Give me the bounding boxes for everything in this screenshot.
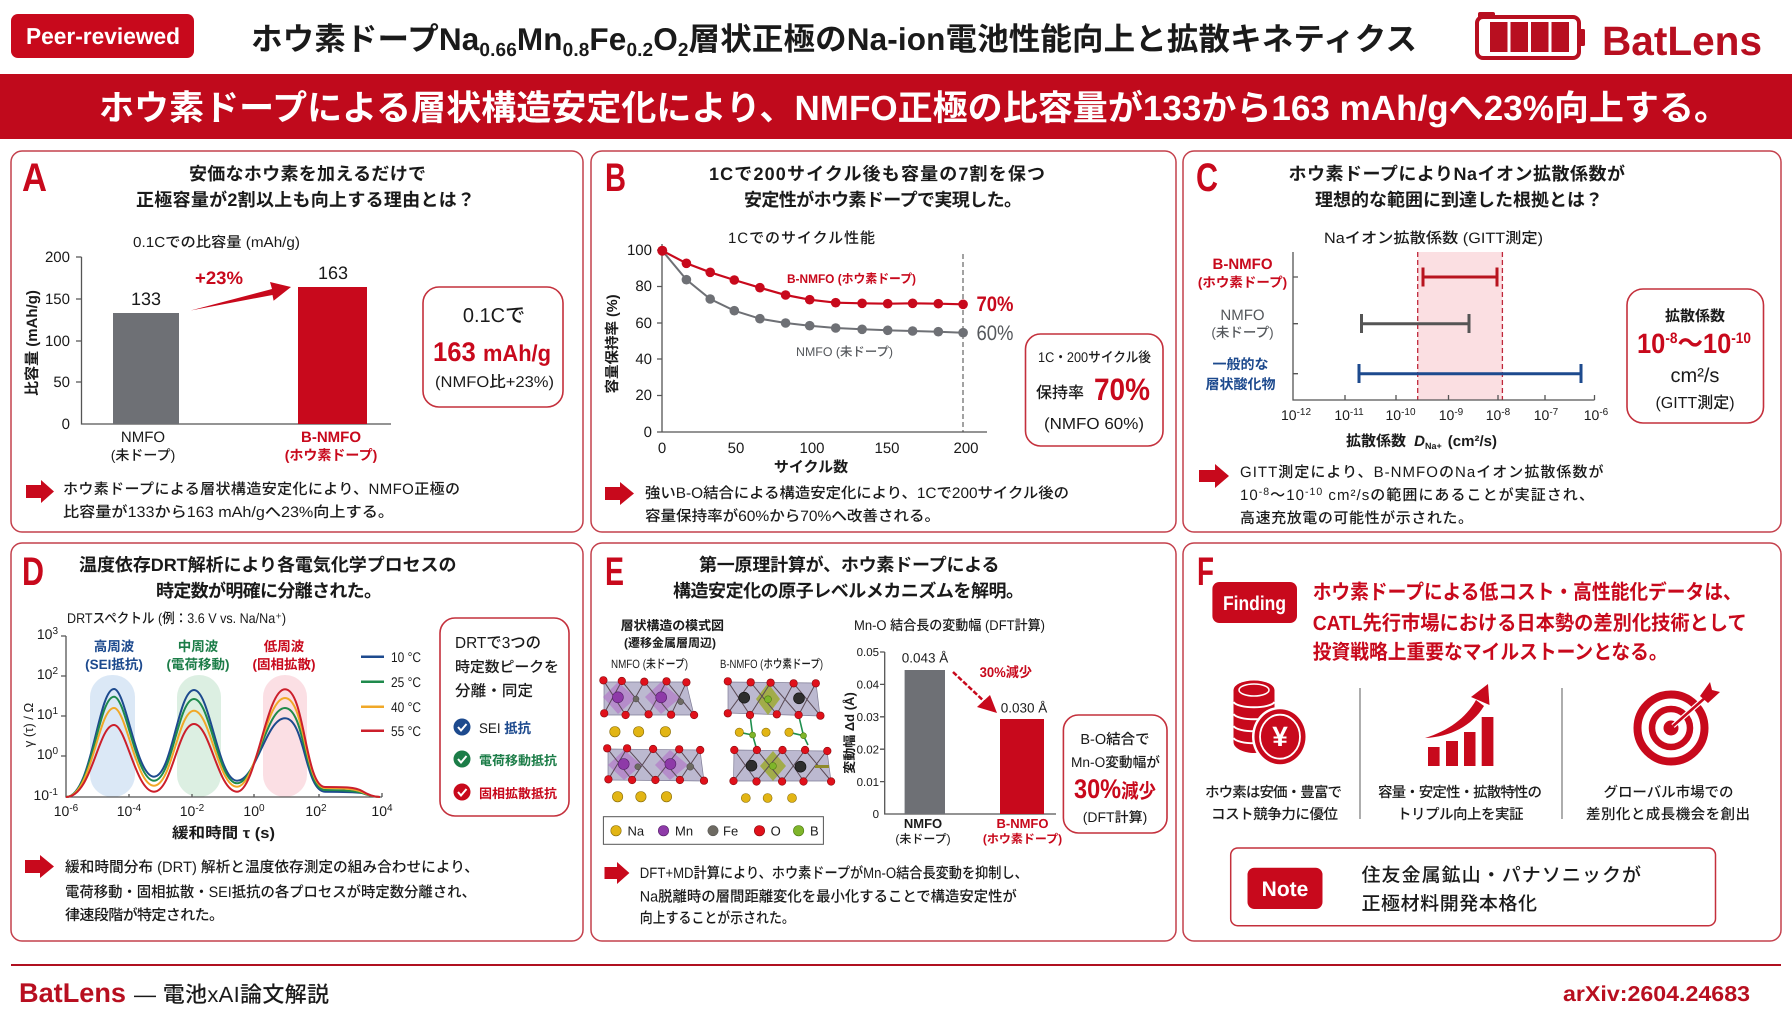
- callout: three time constants: 分離・同定: [455, 682, 533, 700]
- range chart: diffusion coefficient: (cm²/s): [1448, 433, 1497, 450]
- panel: F: [1183, 543, 1781, 941]
- badge: Finding: [1212, 582, 1297, 623]
- logo: BatLens battery: BatLens: [1602, 18, 1762, 64]
- bar chart: specific capacity: 0.1Cでの比容量 (mAh/g): [133, 234, 300, 251]
- note box: 住友金属鉱山・パナソニックが: [1362, 865, 1641, 887]
- bar chart: Mn-O variation: 0.05: [857, 647, 879, 659]
- heading E: 構造安定化の原子レベルメカニズムを解明。: [673, 581, 1024, 601]
- callout: diffusion range: ～10: [1677, 328, 1731, 359]
- curve: 40 °C: [66, 698, 380, 797]
- series: B-NMFO: [657, 246, 968, 309]
- callout: 163 mAh/g: (NMFO比+23%): [435, 374, 554, 391]
- conclusion E: Na脱離時の層間距離変化を最小化することで構造安定性が: [640, 889, 1017, 906]
- line chart: cycle performance: サイクル数: [774, 459, 848, 476]
- panel letter B: B: [605, 156, 626, 200]
- line chart: cycle performance: 150: [874, 440, 900, 457]
- panel letter A: A: [22, 156, 47, 200]
- line chart: cycle performance: [604, 230, 1014, 476]
- bar chart: Mn-O variation: 0.030 Å: [1001, 701, 1047, 716]
- caption: global market: 差別化と成長機会を創出: [1586, 806, 1750, 823]
- line chart: cycle performance: 40: [635, 351, 652, 368]
- title: Mn: [517, 21, 563, 57]
- bar chart: specific capacity: 150: [45, 291, 70, 308]
- line chart: cycle performance: 0: [644, 424, 652, 441]
- bar chart: Mn-O variation: 0.03: [857, 712, 879, 724]
- line chart: DRT spectrum: DRTスペクトル (例：3.6 V vs. Na/Na⁺): [67, 610, 286, 626]
- conclusion C: 10: [1240, 487, 1258, 504]
- diagram: layered structure: NMFO (未ドープ): [611, 657, 688, 671]
- heading D: 時定数が明確に分離された。: [156, 581, 382, 601]
- line chart: cycle performance: 20: [635, 387, 652, 404]
- callout: 163 mAh/g: 0.1Cで: [463, 305, 525, 327]
- line chart: DRT spectrum: 10: [34, 787, 49, 803]
- conclusion C: [1240, 464, 1604, 527]
- bar chart: Mn-O variation: 0.02: [857, 744, 879, 756]
- structure: B-NMFO: [724, 678, 835, 802]
- legend: atoms: [603, 817, 823, 844]
- note box: Note: [1262, 878, 1308, 901]
- callout: three time constants: 固相拡散抵抗: [479, 786, 557, 801]
- callout: retention 70%: 1C・200サイクル後: [1038, 349, 1151, 365]
- range chart: diffusion coefficient: -10: [1401, 407, 1416, 418]
- bar chart: Mn-O variation: [842, 617, 1062, 846]
- line chart: DRT spectrum: γ (τ) / Ω: [21, 702, 36, 747]
- bar chart: specific capacity: 133: [131, 289, 161, 309]
- line chart: DRT spectrum: 2: [52, 666, 58, 677]
- line chart: DRT spectrum: 1: [52, 706, 58, 717]
- callout: three time constants: SEI 抵抗: [479, 720, 531, 736]
- series: NMFO: [662, 251, 968, 338]
- conclusion C: -8: [1259, 486, 1269, 498]
- line chart: cycle performance: 50: [728, 440, 744, 457]
- note box: 正極材料開発本格化: [1362, 893, 1537, 915]
- heading A: 安価なホウ素を加えるだけで: [189, 164, 426, 184]
- line chart: DRT spectrum: [21, 610, 421, 842]
- legend: atoms: Mn: [675, 824, 693, 838]
- line chart: DRT spectrum: 高周波: [94, 639, 135, 654]
- panel: C: [1183, 151, 1781, 532]
- bar chart: specific capacity: (未ドープ): [111, 447, 175, 463]
- bar chart: specific capacity: NMFO: [121, 429, 165, 446]
- caption: cost: ホウ素は安価・豊富で: [1205, 784, 1342, 801]
- title: 0.66: [479, 40, 517, 61]
- heading C: ホウ素ドープによりNaイオン拡散係数が: [1288, 164, 1625, 184]
- line chart: cycle performance: 100: [627, 242, 652, 259]
- line chart: cycle performance: 100: [799, 440, 825, 457]
- bar chart: Mn-O variation: (未ドープ): [895, 832, 951, 846]
- bar chart: specific capacity: 0: [62, 416, 70, 433]
- range chart: diffusion coefficient: 10: [1334, 407, 1350, 423]
- line chart: DRT spectrum: 10: [37, 626, 52, 642]
- conclusion A: [63, 481, 460, 521]
- line chart: DRT spectrum: 2: [321, 803, 327, 814]
- finding statement: 投資戦略上重要なマイルストーンとなる。: [1313, 641, 1668, 664]
- callout: retention 70%: 70%: [1094, 372, 1150, 407]
- title: O: [653, 21, 678, 57]
- range chart: diffusion coefficient: B-NMFO: [1212, 256, 1273, 273]
- callout: 30% reduction: 30%減少: [1074, 774, 1156, 804]
- caption: cost: [1205, 784, 1342, 823]
- conclusion E: [640, 865, 1028, 927]
- callout: diffusion range: -10: [1731, 330, 1751, 347]
- line chart: DRT spectrum: -4: [132, 803, 142, 814]
- panel letter D: D: [22, 550, 44, 594]
- heading C: [1288, 164, 1625, 210]
- legend: atoms: Fe: [723, 824, 738, 838]
- line chart: cycle performance: 1Cでのサイクル性能: [728, 230, 875, 247]
- legend: temperature: 40 °C: [391, 699, 421, 715]
- panel letter F: F: [1197, 550, 1214, 594]
- callout: three time constants: DRTで3つの: [455, 635, 541, 652]
- icon: coins and yen: [1234, 680, 1308, 767]
- curve: 10 °C: [66, 689, 380, 797]
- line chart: DRT spectrum: 0: [52, 746, 58, 757]
- finding statement: ホウ素ドープによる低コスト・高性能化データは、: [1313, 581, 1742, 604]
- conclusion C: GITT測定により、B-NMFOのNaイオン拡散係数が: [1240, 464, 1604, 481]
- range chart: diffusion coefficient: -8: [1501, 407, 1511, 418]
- icon: coins and yen: ¥: [1272, 721, 1288, 752]
- footer brand: — 電池xAI論文解説: [134, 982, 329, 1007]
- heading D: [79, 555, 456, 601]
- legend: temperature: 55 °C: [391, 723, 421, 739]
- heading E: [673, 555, 1024, 601]
- line chart: DRT spectrum: 10: [243, 803, 259, 819]
- panel: A: [11, 151, 583, 532]
- range chart: diffusion coefficient: (ホウ素ドープ): [1198, 275, 1287, 290]
- title: 0.8: [563, 40, 589, 61]
- callout: retention 70%: 保持率: [1036, 384, 1084, 402]
- legend: atoms: O: [771, 824, 781, 838]
- heading C: 理想的な範囲に到達した根拠とは？: [1315, 190, 1603, 210]
- line chart: DRT spectrum: 10: [37, 666, 52, 682]
- range chart: diffusion coefficient: 10: [1281, 407, 1297, 423]
- line chart: cycle performance: 200: [953, 440, 979, 457]
- conclusion D: 電荷移動・固相拡散・SEI抵抗の各プロセスが時定数分離され、: [65, 884, 476, 901]
- title: ホウ素ドープNa: [251, 21, 479, 57]
- heading A: 正極容量が2割以上も向上する理由とは？: [136, 190, 475, 210]
- line chart: DRT spectrum: (SEI抵抗): [85, 657, 143, 672]
- conclusion C: ～10: [1270, 487, 1304, 504]
- bar chart: Mn-O variation: NMFO: [904, 816, 942, 831]
- conclusion B: 容量保持率が60%から70%へ改善される。: [645, 508, 940, 525]
- callout: retention 70%: [1026, 334, 1163, 446]
- line chart: DRT spectrum: 3: [52, 626, 58, 637]
- line chart: DRT spectrum: 10: [37, 746, 52, 762]
- logo: BatLens battery: [1477, 12, 1762, 64]
- diagram: layered structure: 層状構造の模式図: [621, 618, 724, 633]
- legend: atoms: B: [810, 824, 819, 838]
- range chart: diffusion coefficient: -9: [1454, 407, 1464, 418]
- line chart: DRT spectrum: (電荷移動): [166, 657, 230, 672]
- line chart: DRT spectrum: -6: [69, 803, 79, 814]
- footer arXiv id: arXiv:2604.24683: [1563, 982, 1750, 1006]
- badge: Peer-reviewed: [11, 14, 194, 58]
- heading B: [709, 164, 1045, 210]
- range chart: diffusion coefficient: -6: [1599, 407, 1609, 418]
- line chart: DRT spectrum: 4: [387, 803, 393, 814]
- check: solid diffusion: [454, 784, 470, 800]
- callout: three time constants: [440, 618, 569, 816]
- callout: diffusion range: -8: [1665, 330, 1677, 347]
- heading A: [136, 164, 475, 210]
- line chart: cycle performance: NMFO (未ドープ): [796, 345, 893, 359]
- bar chart: Mn-O variation: 30%減少: [980, 664, 1032, 680]
- bar chart: specific capacity: 163: [318, 263, 348, 283]
- arrow E: [604, 862, 629, 884]
- callout: diffusion range: 拡散係数: [1665, 308, 1725, 325]
- arrow B: [605, 482, 634, 505]
- bar chart: Mn-O variation: 0.043 Å: [902, 651, 948, 666]
- bar chart: Mn-O variation: 0.04: [857, 680, 880, 692]
- title: Fe: [589, 21, 626, 57]
- range chart: diffusion coefficient: 10: [1486, 407, 1501, 423]
- callout: three time constants: 電荷移動抵抗: [479, 753, 557, 768]
- conclusion C: -10: [1305, 486, 1322, 498]
- conclusion C: 高速充放電の可能性が示された。: [1240, 510, 1473, 527]
- finding statement: [1313, 581, 1747, 664]
- range chart: diffusion coefficient: 層状酸化物: [1206, 376, 1276, 392]
- heading B: 安定性がホウ素ドープで実現した。: [744, 190, 1022, 210]
- badge: Finding: Finding: [1223, 593, 1286, 615]
- line chart: DRT spectrum: -1: [49, 787, 58, 798]
- conclusion D: 緩和時間分布 (DRT) 解析と温度依存測定の組み合わせにより、: [65, 859, 479, 876]
- callout: diffusion range: 10: [1637, 328, 1668, 359]
- range chart: diffusion coefficient: [1198, 230, 1609, 451]
- line chart: cycle performance: 容量保持率 (%): [604, 294, 621, 394]
- range chart: diffusion coefficient: 10: [1439, 407, 1454, 423]
- heading B: 1Cで200サイクル後も容量の7割を保つ: [709, 164, 1045, 184]
- bar chart: Mn-O variation: (ホウ素ドープ): [983, 832, 1062, 846]
- arrow D: [25, 855, 54, 878]
- bar chart: specific capacity: 比容量 (mAh/g): [24, 290, 41, 396]
- line chart: cycle performance: 80: [635, 278, 652, 295]
- line chart: DRT spectrum: 緩和時間 τ (s): [172, 825, 275, 842]
- bar chart: Mn-O variation: 0: [873, 809, 879, 821]
- line chart: DRT spectrum: 10: [37, 706, 52, 722]
- range chart: diffusion coefficient: 10: [1584, 407, 1599, 423]
- line chart: DRT spectrum: 10: [117, 803, 132, 819]
- callout: diffusion range: cm²/s: [1671, 365, 1719, 387]
- caption: global market: [1586, 784, 1750, 823]
- conclusion E: 向上することが示された。: [640, 910, 795, 927]
- headline band: ホウ素ドープによる層状構造安定化により、NMFO正極の比容量が133から163 mAh/gへ23%向上する。: [99, 89, 1729, 128]
- caption: triple improvement: 容量・安定性・拡散特性の: [1378, 784, 1542, 801]
- line chart: DRT spectrum: -2: [195, 803, 205, 814]
- line chart: DRT spectrum: 10: [305, 803, 321, 819]
- range chart: diffusion coefficient: NMFO: [1220, 307, 1265, 324]
- callout: 163 mAh/g: [423, 287, 563, 407]
- line chart: DRT spectrum: (固相拡散): [252, 657, 316, 672]
- arrow A: [26, 480, 54, 503]
- bar chart: specific capacity: [24, 234, 391, 463]
- caption: global market: グローバル市場での: [1604, 784, 1734, 801]
- bar chart: specific capacity: 200: [45, 249, 70, 266]
- line chart: DRT spectrum: 低周波: [264, 639, 305, 654]
- caption: triple improvement: トリプル向上を実証: [1397, 806, 1524, 823]
- conclusion D: [65, 859, 479, 924]
- callout: 30% reduction: [1063, 715, 1167, 833]
- bar chart: specific capacity: (ホウ素ドープ): [285, 447, 377, 463]
- range chart: diffusion coefficient: Naイオン拡散係数 (GITT測定): [1324, 230, 1543, 247]
- heading E: 第一原理計算が、ホウ素ドープによる: [699, 555, 1000, 575]
- panel: D: [11, 543, 583, 941]
- title: 層状正極のNa-ion電池性能向上と拡散キネティクス: [689, 21, 1417, 57]
- line chart: cycle performance: B-NMFO (ホウ素ドープ): [787, 272, 916, 286]
- callout: 163 mAh/g: 163 mAh/g: [433, 337, 551, 367]
- conclusion B: [645, 485, 1069, 525]
- callout: retention 70%: (NMFO 60%): [1044, 416, 1144, 433]
- arrow C: [1199, 464, 1229, 488]
- range chart: diffusion coefficient: (未ドープ): [1211, 325, 1274, 340]
- bar chart: specific capacity: 50: [53, 374, 70, 391]
- title: 0.2: [626, 40, 653, 61]
- line chart: DRT spectrum: 10: [54, 803, 69, 819]
- bar chart: specific capacity: +23%: [195, 268, 243, 288]
- callout: 30% reduction: B-O結合で: [1080, 731, 1150, 748]
- panel letter E: E: [605, 550, 624, 594]
- line chart: DRT spectrum: 10: [180, 803, 195, 819]
- diagram: layered structure: [600, 618, 835, 844]
- range chart: diffusion coefficient: -11: [1350, 407, 1364, 418]
- caption: triple improvement: [1378, 784, 1542, 823]
- structure: NMFO: [600, 676, 708, 802]
- footer brand: [19, 978, 329, 1008]
- range chart: diffusion coefficient: 拡散係数 D: [1346, 433, 1425, 450]
- range chart: diffusion coefficient: -12: [1297, 407, 1311, 418]
- check: charge transfer: [454, 750, 470, 768]
- legend: temperature: 10 °C: [391, 649, 421, 665]
- callout: diffusion range: [1627, 289, 1764, 423]
- line chart: DRT spectrum: 中周波: [178, 639, 219, 654]
- headline band: [0, 74, 1792, 139]
- conclusion C: cm²/sの範囲にあることが実証され、: [1323, 487, 1594, 504]
- bar chart: Mn-O variation: Mn-O 結合長の変動幅 (DFT計算): [854, 617, 1045, 633]
- finding statement: CATL先行市場における日本勢の差別化技術として: [1313, 612, 1747, 635]
- bar chart: specific capacity: 100: [45, 333, 70, 350]
- curve: 25 °C: [66, 697, 380, 797]
- bar chart: Mn-O variation: 変動幅 Δd (Å): [842, 692, 857, 774]
- heading D: 温度依存DRT解析により各電気化学プロセスの: [79, 555, 456, 575]
- line chart: cycle performance: 70%: [976, 293, 1014, 316]
- legend: temperature: 25 °C: [391, 674, 421, 690]
- conclusion A: ホウ素ドープによる層状構造安定化により、NMFO正極の: [63, 481, 460, 498]
- range chart: diffusion coefficient: 一般的な: [1212, 356, 1268, 372]
- conclusion B: 強いB-O結合による構造安定化により、1Cで200サイクル後の: [645, 485, 1069, 502]
- range chart: diffusion coefficient: Na+: [1425, 441, 1442, 451]
- range chart: diffusion coefficient: 10: [1534, 407, 1549, 423]
- range chart: diffusion coefficient: -7: [1549, 407, 1559, 418]
- diagram: layered structure: B-NMFO (ホウ素ドープ): [720, 657, 823, 671]
- callout: 30% reduction: Mn-O変動幅が: [1071, 754, 1160, 770]
- badge: Peer-reviewed: Peer-reviewed: [26, 23, 180, 49]
- panel: E: [591, 543, 1176, 941]
- line chart: cycle performance: 0: [658, 440, 666, 457]
- conclusion A: 比容量が133から163 mAh/gへ23%向上する。: [63, 504, 394, 521]
- line chart: cycle performance: 60%: [976, 322, 1014, 345]
- range chart: diffusion coefficient: 10: [1385, 407, 1401, 423]
- conclusion E: DFT+MD計算により、ホウ素ドープがMn-O結合長変動を抑制し、: [640, 865, 1028, 882]
- bar chart: Mn-O variation: B-NMFO: [996, 816, 1048, 831]
- line chart: cycle performance: 60: [635, 315, 652, 332]
- line chart: DRT spectrum: 0: [259, 803, 265, 814]
- note box: [1231, 848, 1716, 926]
- curve: 55 °C: [66, 689, 380, 797]
- legend: atoms: Na: [628, 824, 645, 838]
- bar chart: specific capacity: B-NMFO: [301, 429, 361, 446]
- icon: rising bars and arrow: [1425, 684, 1493, 766]
- callout: three time constants: 時定数ピークを: [455, 659, 559, 676]
- panel letter C: C: [1196, 156, 1218, 200]
- caption: cost: コスト競争力に優位: [1211, 806, 1338, 823]
- legend: temperature: [361, 649, 421, 739]
- conclusion D: 律速段階が特定された。: [65, 907, 224, 924]
- callout: diffusion range: (GITT測定): [1655, 394, 1735, 412]
- panel: B: [591, 151, 1176, 532]
- title: 2: [678, 40, 688, 61]
- callout: 30% reduction: (DFT計算): [1083, 809, 1147, 825]
- diagram: layered structure: (遷移金属層周辺): [624, 636, 716, 650]
- bar chart: Mn-O variation: 0.01: [857, 777, 879, 789]
- footer brand: BatLens: [19, 978, 126, 1008]
- icon: target with arrow: [1638, 682, 1720, 762]
- line chart: DRT spectrum: 10: [371, 803, 387, 819]
- check: SEI: [454, 718, 470, 736]
